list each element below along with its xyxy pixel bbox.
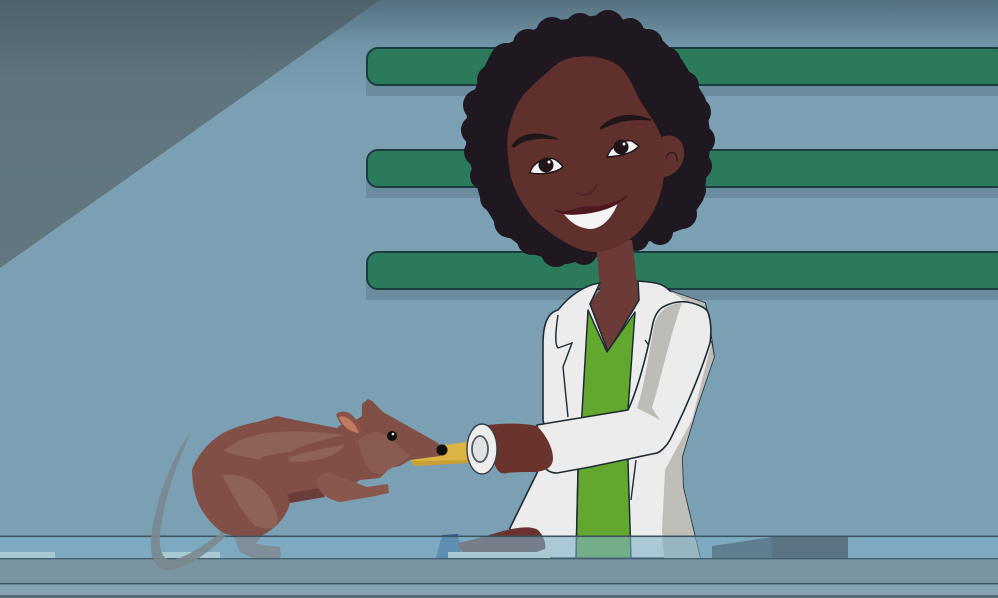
syringe	[411, 424, 497, 474]
eye and nose	[387, 431, 397, 441]
coat shadow	[662, 291, 714, 558]
ear	[336, 411, 362, 433]
fur highlights	[224, 431, 345, 460]
left eye	[530, 158, 563, 174]
diagonal shadow on wall	[0, 0, 380, 268]
neck	[588, 240, 639, 352]
other hand on bench	[436, 527, 545, 558]
front leg	[316, 473, 389, 502]
sleeve shading	[637, 303, 682, 420]
sleeve	[537, 302, 711, 473]
scientist	[461, 10, 715, 558]
lab coat	[505, 281, 714, 558]
box on bench	[712, 536, 848, 559]
mouth	[564, 203, 618, 229]
hind leg and foot	[232, 532, 281, 560]
green scrubs	[576, 310, 635, 558]
coat lapel lines	[556, 315, 650, 558]
rat	[192, 399, 448, 560]
rat tail	[151, 432, 225, 570]
belly shadow	[287, 488, 325, 503]
hair	[461, 10, 715, 267]
ear	[660, 135, 684, 177]
green shelves	[366, 48, 998, 300]
glass bench	[0, 536, 998, 598]
face	[507, 56, 664, 252]
body	[192, 399, 443, 537]
eyebrows	[512, 134, 558, 147]
right eye	[607, 141, 639, 157]
hand	[488, 424, 553, 473]
nose	[576, 184, 597, 195]
